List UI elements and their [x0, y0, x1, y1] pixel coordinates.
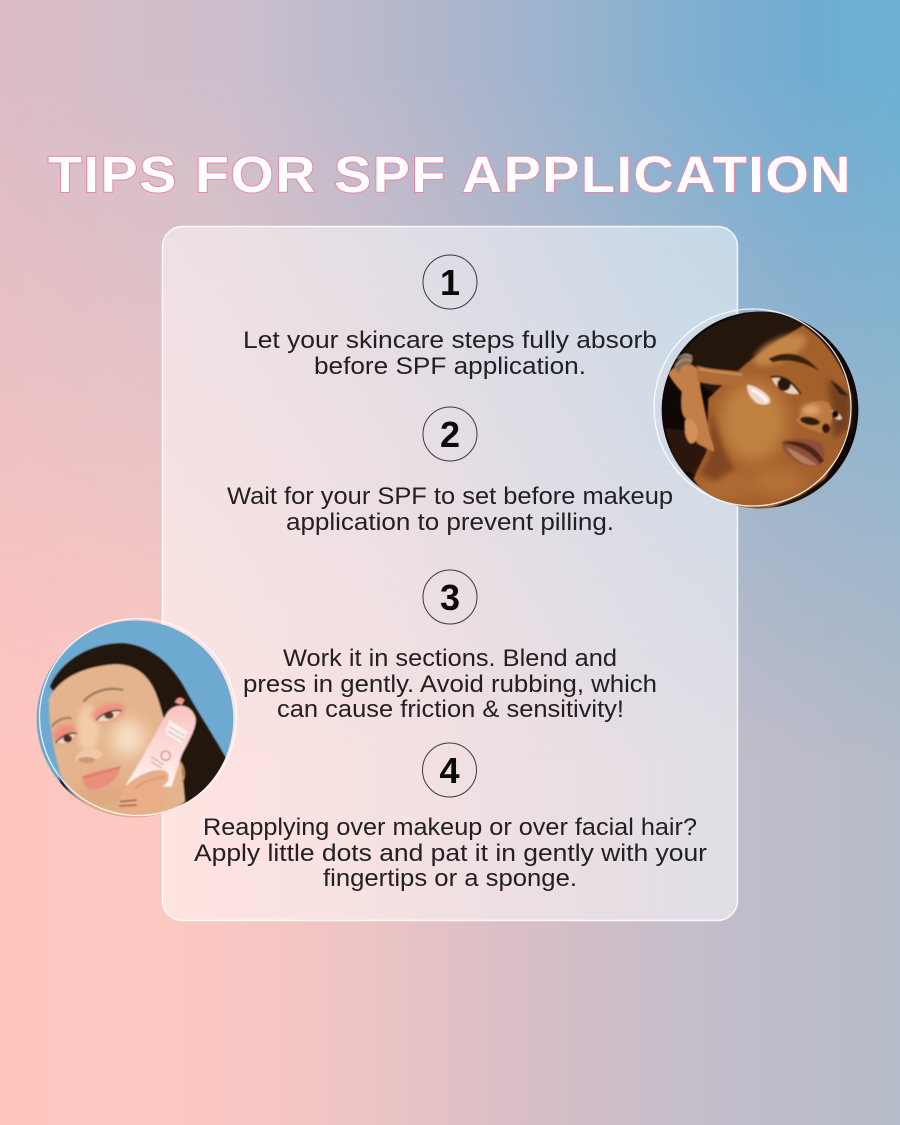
tip 2 text: [227, 483, 673, 536]
photo ring: man: [654, 309, 851, 506]
nose: [796, 401, 832, 433]
tip 3 text: [243, 645, 657, 723]
number badge 4: 4: [439, 750, 460, 791]
nose: [75, 748, 103, 762]
tip 2 text: application to prevent pilling.: [286, 509, 614, 536]
panel: tips card: [162, 226, 738, 920]
tip 4: [194, 743, 707, 892]
eyeshadow: [90, 700, 127, 725]
lips: [782, 439, 825, 466]
tip 4 text: [194, 814, 707, 892]
SPF smear: [747, 385, 770, 405]
number badge 2: [423, 407, 477, 461]
tip 2 text: Wait for your SPF to set before makeup: [227, 483, 673, 510]
tip 2: [227, 407, 673, 536]
brows: [83, 689, 123, 702]
tip 1 text: before SPF application.: [314, 353, 586, 380]
number badge 3: [423, 570, 477, 624]
number badge 3: 3: [440, 577, 460, 618]
tip 1 text: [243, 327, 657, 380]
tip 3 text: press in gently. Avoid rubbing, which: [243, 671, 657, 698]
tip 1 text: Let your skincare steps fully absorb: [243, 327, 657, 354]
tube: [126, 706, 196, 787]
eyebrows: [768, 354, 819, 371]
photo: woman holding sunscreen tube: [36, 620, 234, 818]
number badge 1: [423, 255, 477, 309]
hand: [668, 364, 714, 452]
tip 4 text: Reapplying over makeup or over facial hair?: [203, 814, 697, 841]
tip 4 text: Apply little dots and pat it in gently with your: [194, 840, 707, 867]
portrait: [49, 643, 227, 818]
fingers and rings: [121, 769, 170, 804]
lips: [82, 766, 121, 790]
eyes: [97, 711, 121, 721]
number badge 1: 1: [440, 262, 460, 303]
tip 4 text: fingertips or a sponge.: [323, 865, 577, 892]
tip 3: [243, 570, 657, 723]
photo ring: woman: [40, 618, 236, 816]
number badge 2: 2: [440, 414, 460, 455]
number badge 4: [422, 743, 476, 797]
tip 3 text: can cause friction & sensitivity!: [277, 696, 624, 723]
photo: man applying SPF on cheek: [662, 312, 858, 508]
tip 3 text: Work it in sections. Blend and: [283, 645, 617, 672]
title: TIPS FOR SPF APPLICATION: [48, 146, 852, 203]
tip 1: [243, 255, 657, 380]
eyes: [772, 378, 799, 394]
portrait: [665, 310, 857, 508]
